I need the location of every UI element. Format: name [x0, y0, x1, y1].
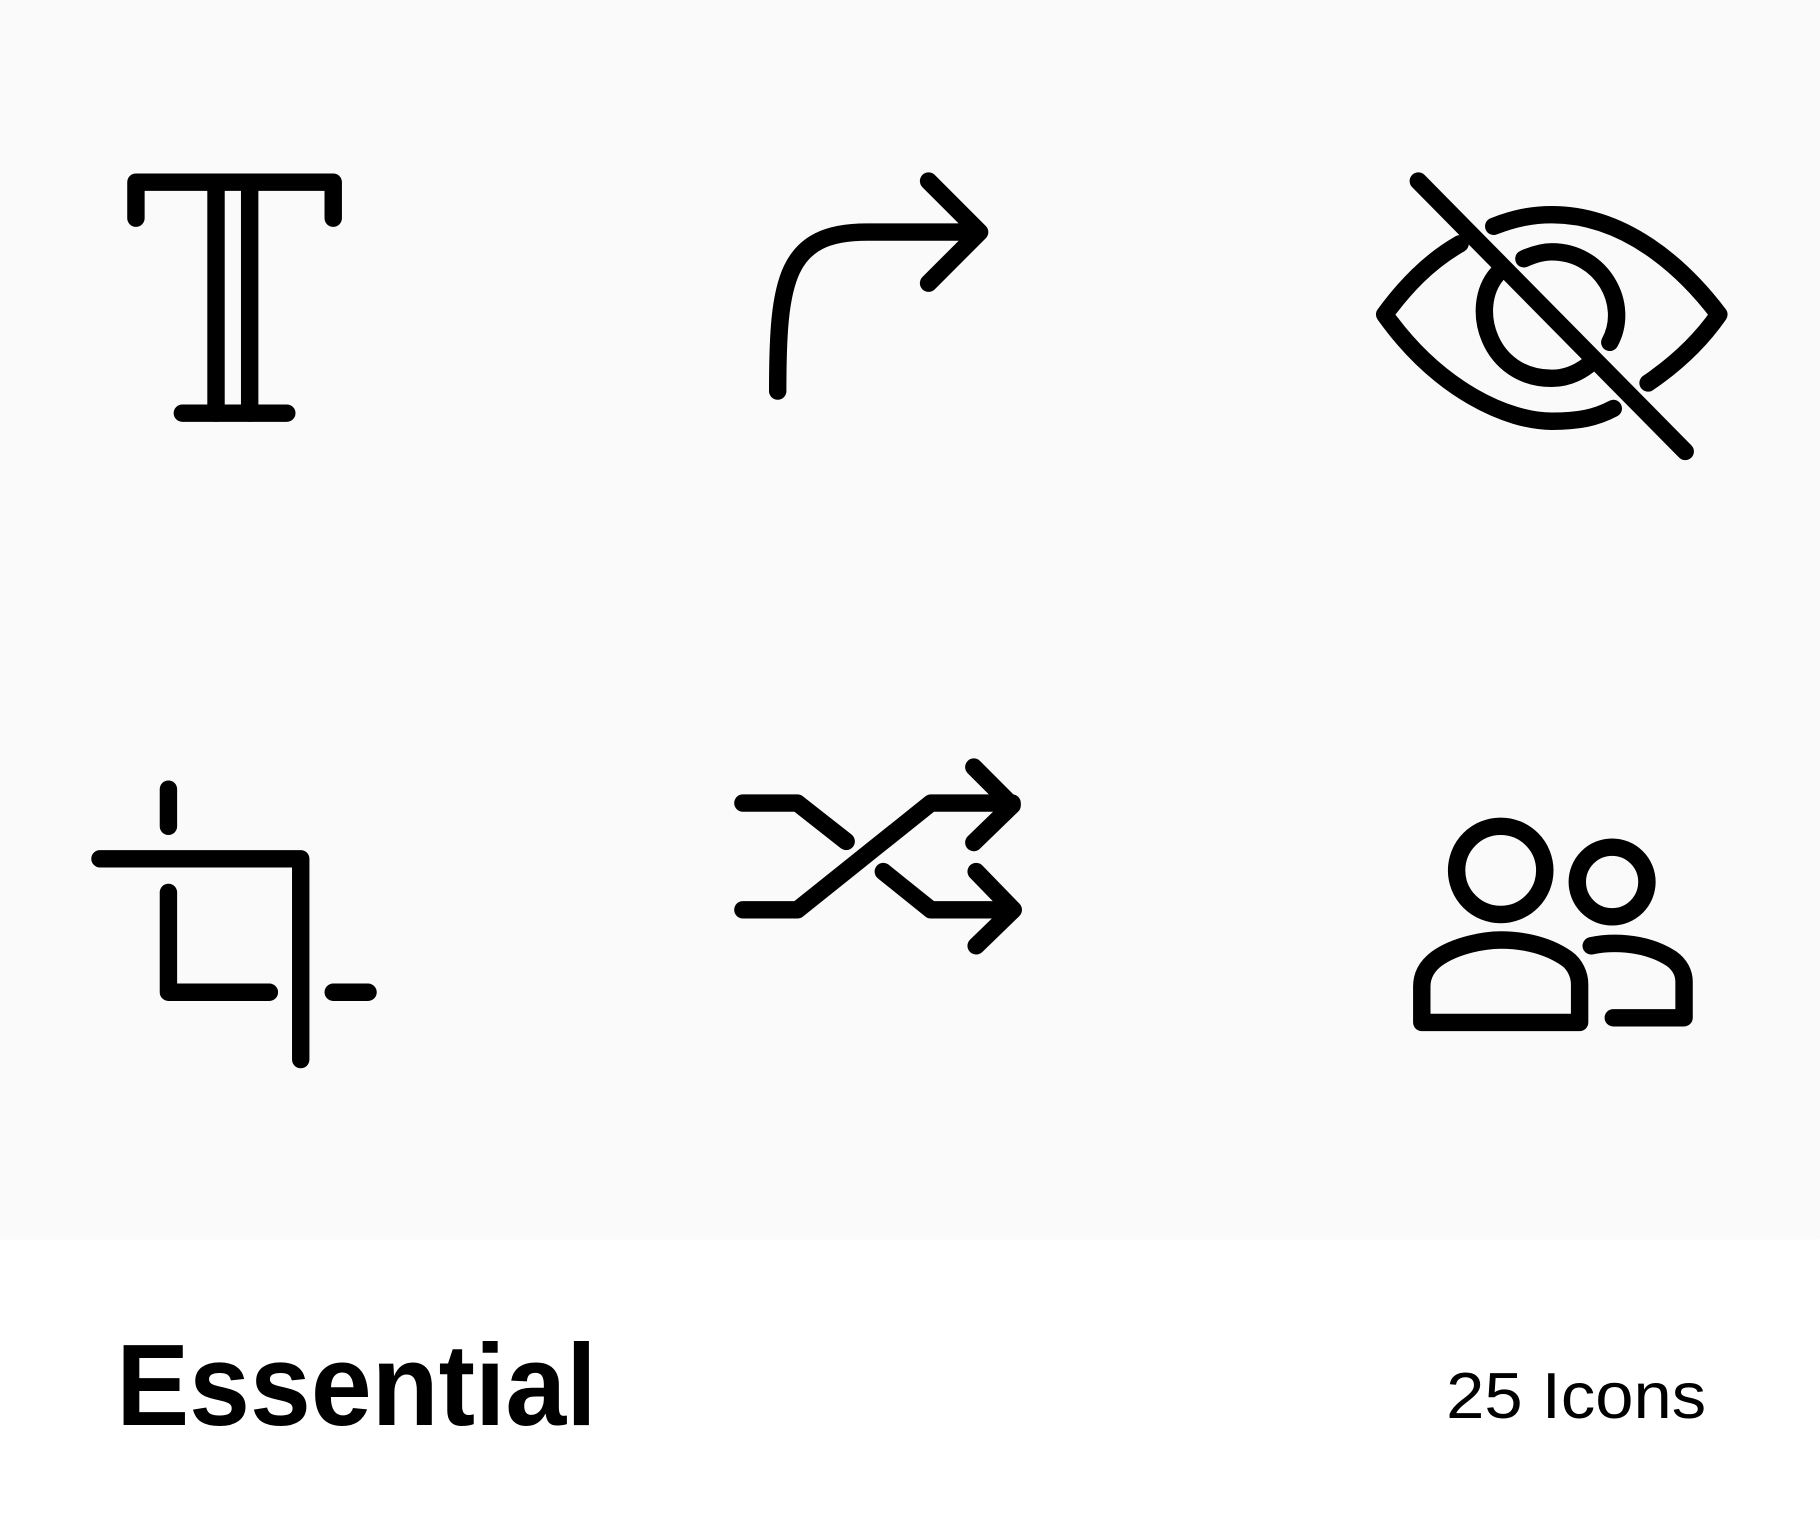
icon: text T — [136, 182, 333, 413]
icon: redo arrow — [778, 181, 980, 391]
icon: eye slash — [1385, 181, 1719, 451]
icon: users — [1422, 826, 1684, 1022]
title: Essential — [116, 1320, 597, 1450]
icon count: 25 Icons — [1446, 1359, 1706, 1432]
icon: crop — [100, 789, 368, 1060]
icon: shuffle — [743, 767, 1013, 946]
